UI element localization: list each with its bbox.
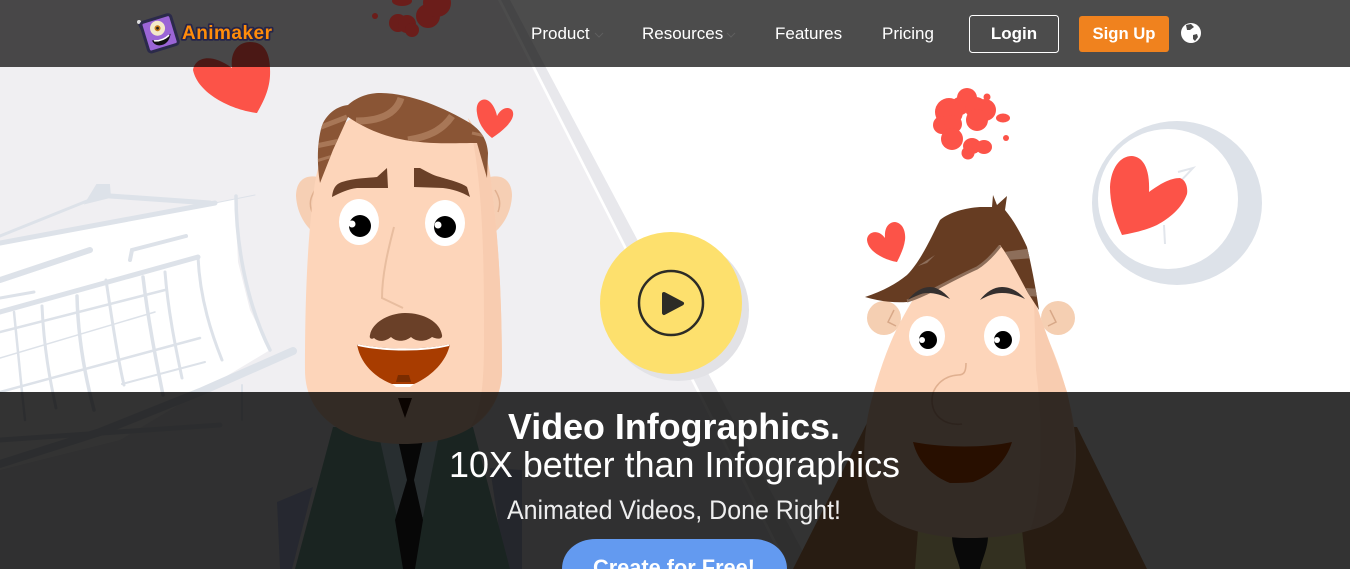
- man two: hair: [865, 195, 1040, 310]
- logo: Animaker: [137, 14, 273, 53]
- logo: Animaker: Animaker: [182, 23, 273, 44]
- heading: Video Infographics: Video Infographics.: [508, 406, 840, 447]
- man one: nose: [382, 227, 403, 308]
- heading: 10X better than Infographics: 10X better than Infographics: [449, 444, 900, 485]
- icon: small heart on hair: [477, 100, 513, 138]
- button: Sign Up: [1079, 16, 1169, 52]
- play button: [600, 232, 749, 381]
- illustration: man with moustache: [277, 93, 522, 569]
- nav link: Pricing: Pricing: [882, 24, 934, 43]
- man one: goatee: [398, 398, 412, 418]
- button: Create for Free: [562, 539, 787, 569]
- button: Login: Login: [991, 24, 1037, 43]
- nav link: Product: Product: [531, 24, 590, 43]
- man two: ears: [867, 301, 1075, 335]
- bottom caption band: [0, 392, 1350, 569]
- nav link: Features: Features: [775, 24, 842, 43]
- icon: heart beside hair: [867, 222, 905, 262]
- button: Sign Up: Sign Up: [1092, 24, 1156, 43]
- man one: eyes: [339, 199, 465, 246]
- background: grey diagonal panel: [0, 0, 812, 569]
- icon: large heart top left: [193, 42, 270, 113]
- top navigation bar: [0, 0, 1350, 67]
- man one: ears: [296, 176, 512, 236]
- man two: coat and shirt: [793, 423, 1147, 569]
- man two: mouth: [913, 442, 1012, 483]
- man one: hair: [316, 93, 490, 183]
- man one: mouth: [357, 344, 450, 387]
- man two: nose: [932, 363, 966, 424]
- icon: paint splatter: [933, 88, 1010, 160]
- man one: moustache: [370, 313, 442, 341]
- subheading: Animated Videos, Done Right!: [507, 495, 841, 525]
- icon: globe: [1181, 23, 1201, 43]
- illustration: calendar sketch: [0, 185, 293, 470]
- man two: face: [864, 223, 1076, 538]
- man one: face: [305, 105, 502, 444]
- man one: jacket and tie: [277, 427, 522, 569]
- nav link: Resources: Resources: [642, 24, 723, 43]
- button: Login: [970, 16, 1058, 52]
- icon: paint blob in header: [372, 0, 451, 37]
- man one: eyebrows: [332, 168, 470, 197]
- icon: heart in circle: [1092, 121, 1262, 285]
- illustration: man with brown hair: [793, 195, 1147, 569]
- man two: eyes: [909, 316, 1020, 356]
- man two: eyebrows: [908, 287, 1025, 300]
